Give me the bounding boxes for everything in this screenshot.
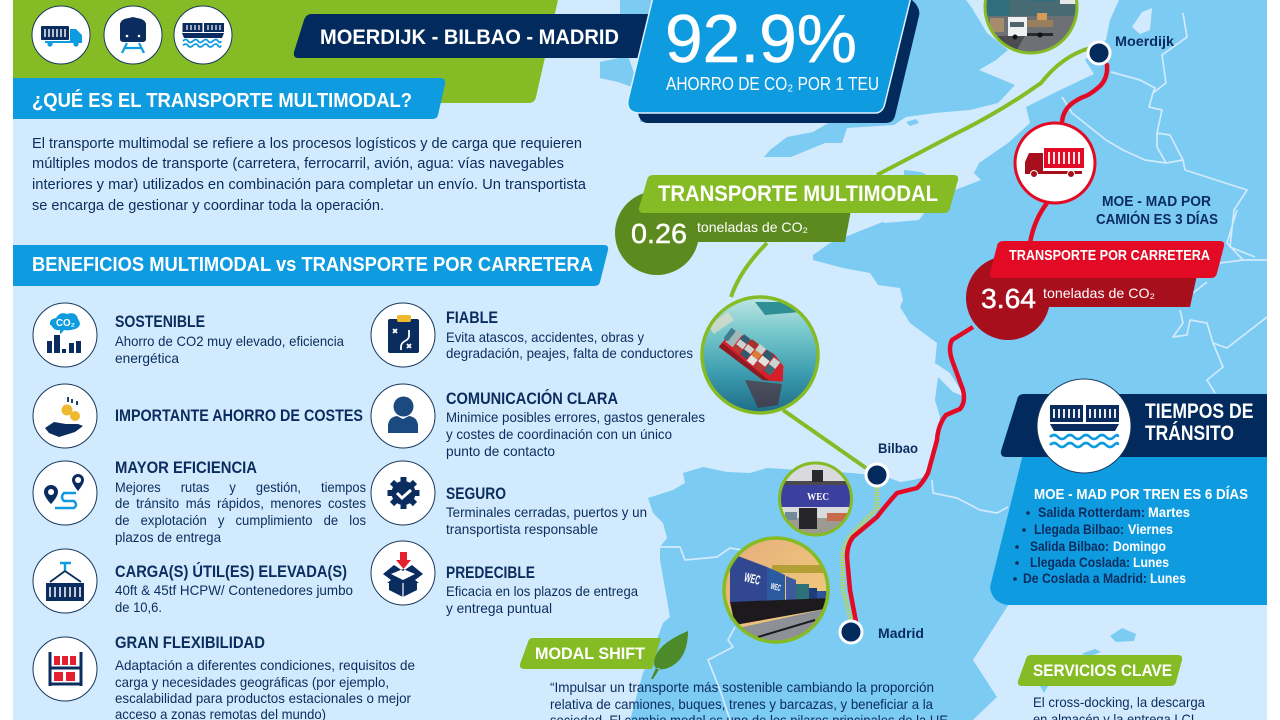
- text: truck duration: [1096, 196, 1218, 224]
- panel: modal shift: [520, 631, 948, 720]
- benefit: predecible: y entrega puntual: [446, 600, 552, 616]
- benefit: ahorro de costes: IMPORTANTE AHORRO DE COSTES: [115, 407, 363, 425]
- benefit: fiable: Evita atascos, accidentes, obras y: [446, 329, 644, 345]
- panel: modal shift: “Impulsar un transporte más sostenible cambiando la proporción: [550, 679, 934, 695]
- icon: truck: [32, 6, 90, 64]
- benefit: carga util elevada: de 10,6.: [115, 599, 162, 615]
- benefit: sostenible: Ahorro de CO2 muy elevado, eficiencia: [115, 333, 344, 349]
- photo: reach stacker: WEC: [807, 492, 829, 503]
- benefit: sostenible: CO₂: [56, 318, 75, 329]
- text block: definition: [32, 136, 587, 214]
- panel: transit times: TIEMPOS DE: [1145, 400, 1254, 423]
- green header panel: [13, 0, 558, 103]
- photo: port truck: [985, 0, 1077, 60]
- icon: leaf: [651, 631, 688, 679]
- benefit: comunicacion clara: COMUNICACIÓN CLARA: [446, 389, 618, 408]
- benefit: mayor eficiencia: plazos de entrega: [115, 529, 221, 545]
- benefit: seguro: transportista responsable: [446, 521, 598, 537]
- panel: modal shift: relativa de camiones, buques, trenes y barcazas, y beneficiar a la: [550, 696, 933, 712]
- benefit: seguro: Terminales cerradas, puertos y un: [446, 504, 647, 520]
- icon: train: [104, 6, 162, 64]
- benefit: gran flexibilidad: [33, 634, 415, 720]
- benefit: gran flexibilidad: escalabilidad para productos estacionales o mejor: [115, 690, 411, 706]
- heading: benefits: BENEFICIOS MULTIMODAL vs TRANSPORTE POR CARRETERA: [32, 254, 593, 276]
- stat panel: CO2 saving: [628, 0, 919, 123]
- benefit: gran flexibilidad: carga y necesidades geográficas (por ejemplo,: [115, 674, 389, 690]
- benefit: carga util elevada: [33, 549, 353, 615]
- panel: transit times: Lunes: [1150, 570, 1186, 586]
- benefit: fiable: degradación, peajes, falta de conductores: [446, 345, 693, 361]
- photo: reach stacker: [778, 462, 854, 536]
- benefit: mayor eficiencia: de explotación y cumplimiento de los: [115, 512, 366, 528]
- benefit: sostenible: energética: [115, 350, 179, 366]
- panel: key services: SERVICIOS CLAVE: [1033, 661, 1172, 680]
- benefit: sostenible: SOSTENIBLE: [115, 313, 205, 331]
- panel: transit times: TRÁNSITO: [1145, 422, 1234, 445]
- panel: transit times: Salida Bilbao:: [1030, 538, 1109, 554]
- route banner: [294, 14, 660, 58]
- benefit: predecible: [371, 541, 638, 616]
- panel: transit times: Martes: [1148, 504, 1190, 520]
- text: truck duration: CAMIÓN ES 3 DÍAS: [1096, 210, 1218, 228]
- panel: key services: [1018, 655, 1205, 720]
- photo: container train: WEC: [743, 569, 762, 588]
- stat panel: CO2 saving: 92.9%: [665, 1, 857, 77]
- panel: transit times: Domingo: [1113, 538, 1166, 554]
- benefit: seguro: [371, 461, 647, 537]
- icon: ship in circle: [1037, 379, 1131, 473]
- panel: transit times: De Coslada a Madrid:: [1023, 570, 1147, 586]
- node: Moerdijk: [1088, 33, 1174, 64]
- icon: ship: [174, 6, 232, 64]
- panel: transit times: Salida Rotterdam:: [1038, 504, 1145, 520]
- benefit: sostenible: [33, 303, 344, 367]
- road route line: [847, 65, 1107, 622]
- photo: container train: WEC: [770, 581, 782, 593]
- heading: what is multimodal: ¿QUÉ ES EL TRANSPORTE MULTIMODAL?: [32, 89, 412, 112]
- text: truck duration: MOE - MAD POR: [1102, 193, 1211, 210]
- benefit: comunicacion clara: Minimice posibles errores, gastos generales: [446, 409, 705, 425]
- node: Bilbao: Bilbao: [878, 440, 918, 456]
- benefit: comunicacion clara: y costes de coordinación con un único: [446, 426, 672, 442]
- panel: modal shift: MODAL SHIFT: [535, 644, 646, 663]
- benefit: mayor eficiencia: MAYOR EFICIENCIA: [115, 459, 257, 477]
- panel: transit times: Lunes: [1133, 554, 1169, 570]
- benefit: gran flexibilidad: GRAN FLEXIBILIDAD: [115, 634, 265, 652]
- benefit: ahorro de costes: [33, 384, 363, 448]
- label: road CO2: 3.64: [981, 283, 1036, 314]
- icon: red truck: [1015, 123, 1095, 203]
- node: Moerdijk: Moerdijk: [1115, 33, 1174, 49]
- label: road CO2: TRANSPORTE POR CARRETERA: [1009, 247, 1210, 264]
- rail route line: [842, 487, 877, 620]
- benefit: fiable: FIABLE: [446, 309, 498, 327]
- panel: transit times: Llegada Coslada:: [1030, 554, 1130, 570]
- node: Bilbao: [866, 440, 918, 486]
- benefit: gran flexibilidad: Adaptación a diferentes condiciones, requisitos de: [115, 657, 415, 673]
- node: Madrid: Madrid: [878, 625, 924, 641]
- route banner: MOERDIJK - BILBAO - MADRID: [320, 26, 619, 49]
- benefit: mayor eficiencia: [33, 459, 366, 545]
- panel: transit times: [990, 379, 1267, 605]
- panel: transit times: Llegada Bilbao:: [1034, 521, 1124, 537]
- label: road CO2: [966, 241, 1224, 340]
- heading: benefits: [13, 245, 608, 286]
- label: multimodal CO2: 0.26: [631, 218, 687, 249]
- label: road CO2: toneladas de CO₂: [1043, 285, 1155, 301]
- benefit: comunicacion clara: punto de contacto: [446, 443, 555, 459]
- benefit: carga util elevada: CARGA(S) ÚTIL(ES) ELEVADA(S): [115, 562, 347, 581]
- heading: what is multimodal: [13, 78, 445, 119]
- photo: container train: [722, 536, 830, 646]
- benefit: carga util elevada: 40ft & 45tf HCPW/ Contenedores jumbo: [115, 582, 353, 598]
- panel: transit times: MOE - MAD POR TREN ES 6 DÍAS: [1034, 486, 1248, 503]
- panel: transit times: Viernes: [1128, 521, 1173, 537]
- text block: definition: El transporte multimodal se refiere a los procesos logísticos y de carga que requieren: [32, 136, 582, 152]
- benefit: mayor eficiencia: de tránsito más rápidos, menores costes: [115, 495, 366, 511]
- benefit: predecible: PREDECIBLE: [446, 564, 535, 582]
- photo: container ship: [700, 295, 820, 415]
- node: Madrid: [840, 621, 924, 643]
- benefit: predecible: Eficacia en los plazos de entrega: [446, 583, 638, 599]
- label: multimodal CO2: TRANSPORTE MULTIMODAL: [658, 181, 938, 206]
- benefit: fiable: [371, 303, 693, 367]
- label: multimodal CO2: toneladas de CO₂: [697, 219, 808, 235]
- label: multimodal CO2: [615, 175, 958, 275]
- text block: definition: se encarga de gestionar y coordinar toda la operación.: [32, 198, 384, 214]
- text block: definition: múltiples modos de transporte (carretera, ferrocarril, avión, agua: vías navegables: [32, 156, 564, 172]
- benefit: comunicacion clara: [371, 384, 705, 459]
- benefit: seguro: SEGURO: [446, 485, 506, 503]
- panel: key services: El cross-docking, la descarga: [1033, 694, 1205, 710]
- stat panel: CO2 saving: AHORRO DE CO₂ POR 1 TEU: [666, 74, 879, 94]
- benefit: mayor eficiencia: Mejores rutas y gestión, tiempos: [115, 479, 366, 495]
- multimodal route line: [731, 48, 1090, 468]
- text block: definition: interiores y mar) utilizados en combinación para completar un envío. Un transportista: [32, 177, 587, 193]
